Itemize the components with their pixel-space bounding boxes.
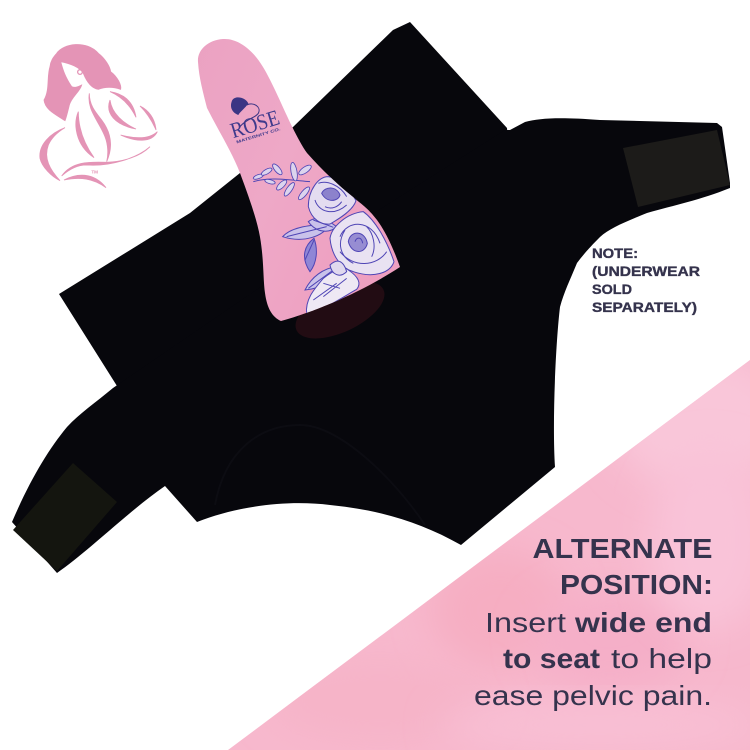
note: underwear sold separately: NOTE: — [592, 246, 638, 261]
callout: alternate position text: ease pelvic pain. — [474, 680, 712, 711]
callout: alternate position text: to seat — [503, 643, 600, 674]
callout: alternate position text: Insert — [485, 607, 566, 638]
note: underwear sold separately: (UNDERWEAR — [592, 264, 700, 279]
garment: upper waistband — [59, 22, 520, 386]
callout: alternate position text: to help — [611, 643, 712, 674]
callout: alternate position text: POSITION: — [560, 569, 713, 600]
note: underwear sold separately: SOLD — [592, 282, 632, 297]
pad brand wordmark: ROSE — [227, 105, 282, 143]
note: underwear sold separately — [592, 246, 700, 315]
pad brand mini logo — [231, 97, 259, 127]
note: underwear sold separately: SEPARATELY) — [592, 300, 697, 315]
illustration: large rose — [330, 212, 394, 275]
garment: main belt and underwear — [12, 118, 730, 573]
panel: watercolor pink corner — [228, 350, 750, 750]
illustration: upper rose — [308, 177, 356, 224]
illustration: lower petals — [306, 261, 359, 314]
velcro patch: left — [13, 463, 117, 571]
logo: Rose Maternity woman and rose: TM — [91, 170, 98, 175]
cold pack pad — [198, 39, 400, 321]
velcro patch: right — [623, 130, 730, 207]
cold pack pad: MATERNITY CO. — [236, 126, 281, 144]
gel pack base under pad — [287, 270, 393, 350]
logo: Rose Maternity woman and rose — [40, 45, 157, 188]
callout: alternate position text — [474, 533, 713, 711]
illustration: fern sprig — [253, 162, 313, 201]
illustration: leaves — [283, 218, 337, 290]
callout: alternate position text: ALTERNATE — [532, 533, 712, 564]
callout: alternate position text: wide end — [574, 607, 712, 638]
gusset detail — [215, 425, 425, 525]
